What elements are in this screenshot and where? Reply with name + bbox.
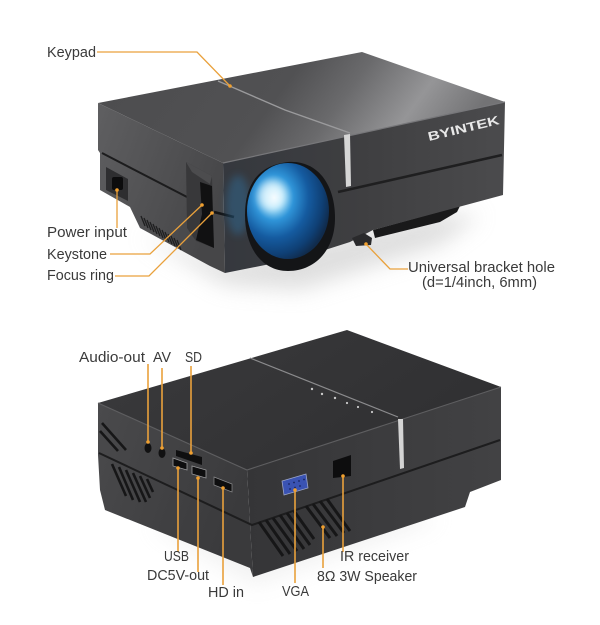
floor shadow — [140, 215, 480, 290]
HDMI port — [214, 477, 232, 492]
base strip — [373, 206, 460, 238]
VGA port — [282, 474, 308, 495]
front face — [223, 102, 505, 273]
label: Keystone: Keystone — [47, 247, 107, 263]
label: Keypad: Keypad — [47, 45, 96, 61]
AV leader — [161, 368, 163, 448]
front seam by lens — [214, 212, 234, 217]
USB leader — [177, 468, 179, 552]
side vent — [141, 216, 181, 250]
IR receiver leader — [342, 476, 344, 552]
focus ring leader — [115, 213, 212, 276]
floor shadow — [150, 510, 440, 585]
body seam lines — [102, 153, 187, 197]
top face — [98, 52, 505, 163]
label: VGA: VGA — [282, 584, 309, 600]
SD slot — [176, 450, 202, 465]
power input leader — [116, 190, 118, 228]
callouts: leader lines — [97, 52, 408, 585]
label: DC5V-out: DC5V-out — [147, 568, 209, 584]
label: Focus ring: Focus ring — [47, 268, 114, 284]
top projector: front view — [98, 52, 505, 290]
label: IR receiver: IR receiver — [340, 549, 409, 565]
label: SD: SD — [185, 350, 202, 366]
VGA leader — [294, 490, 296, 583]
label: speaker: 8Ω 3W Speaker — [317, 569, 417, 585]
top face — [98, 330, 501, 470]
label: AV: AV — [153, 350, 171, 366]
label: Universal bracket hole: Universal bracket hole — [408, 260, 555, 276]
DC5V-out leader — [197, 478, 199, 572]
label: bracket size: (d=1/4inch, 6mm) — [422, 275, 537, 291]
audio-out leader — [147, 364, 149, 442]
bottom projector: rear view — [98, 330, 501, 585]
label: HD in: HD in — [208, 585, 244, 601]
label: Audio-out: Audio-out — [79, 350, 145, 366]
left side face — [98, 403, 253, 577]
left side face — [98, 103, 225, 273]
brand logo: BYINTEK — [426, 113, 501, 144]
label: USB: USB — [164, 549, 189, 565]
keystone and focus panel — [186, 162, 214, 248]
power port — [106, 167, 128, 201]
keystone leader — [110, 205, 202, 254]
silver bar — [398, 419, 404, 469]
top strip — [250, 358, 398, 417]
right vents — [259, 499, 350, 556]
IR receiver window — [333, 455, 351, 478]
right side face — [247, 387, 501, 577]
USB ports — [173, 458, 206, 478]
labels — [47, 45, 555, 601]
keypad leader — [97, 52, 230, 86]
left vents — [100, 423, 153, 502]
silver bar — [344, 134, 351, 187]
audio and AV jacks — [144, 443, 166, 458]
speaker leader — [322, 527, 324, 568]
label: Power input: Power input — [47, 225, 127, 241]
keypad dots — [311, 388, 373, 413]
bracket knob — [352, 233, 372, 246]
bracket hole leader — [366, 244, 408, 269]
lens — [226, 162, 335, 271]
SD leader — [190, 366, 192, 453]
keypad strip — [218, 81, 350, 133]
callouts: anchor dots — [115, 84, 368, 529]
HD in leader — [222, 488, 224, 585]
edges and seams — [98, 387, 501, 470]
